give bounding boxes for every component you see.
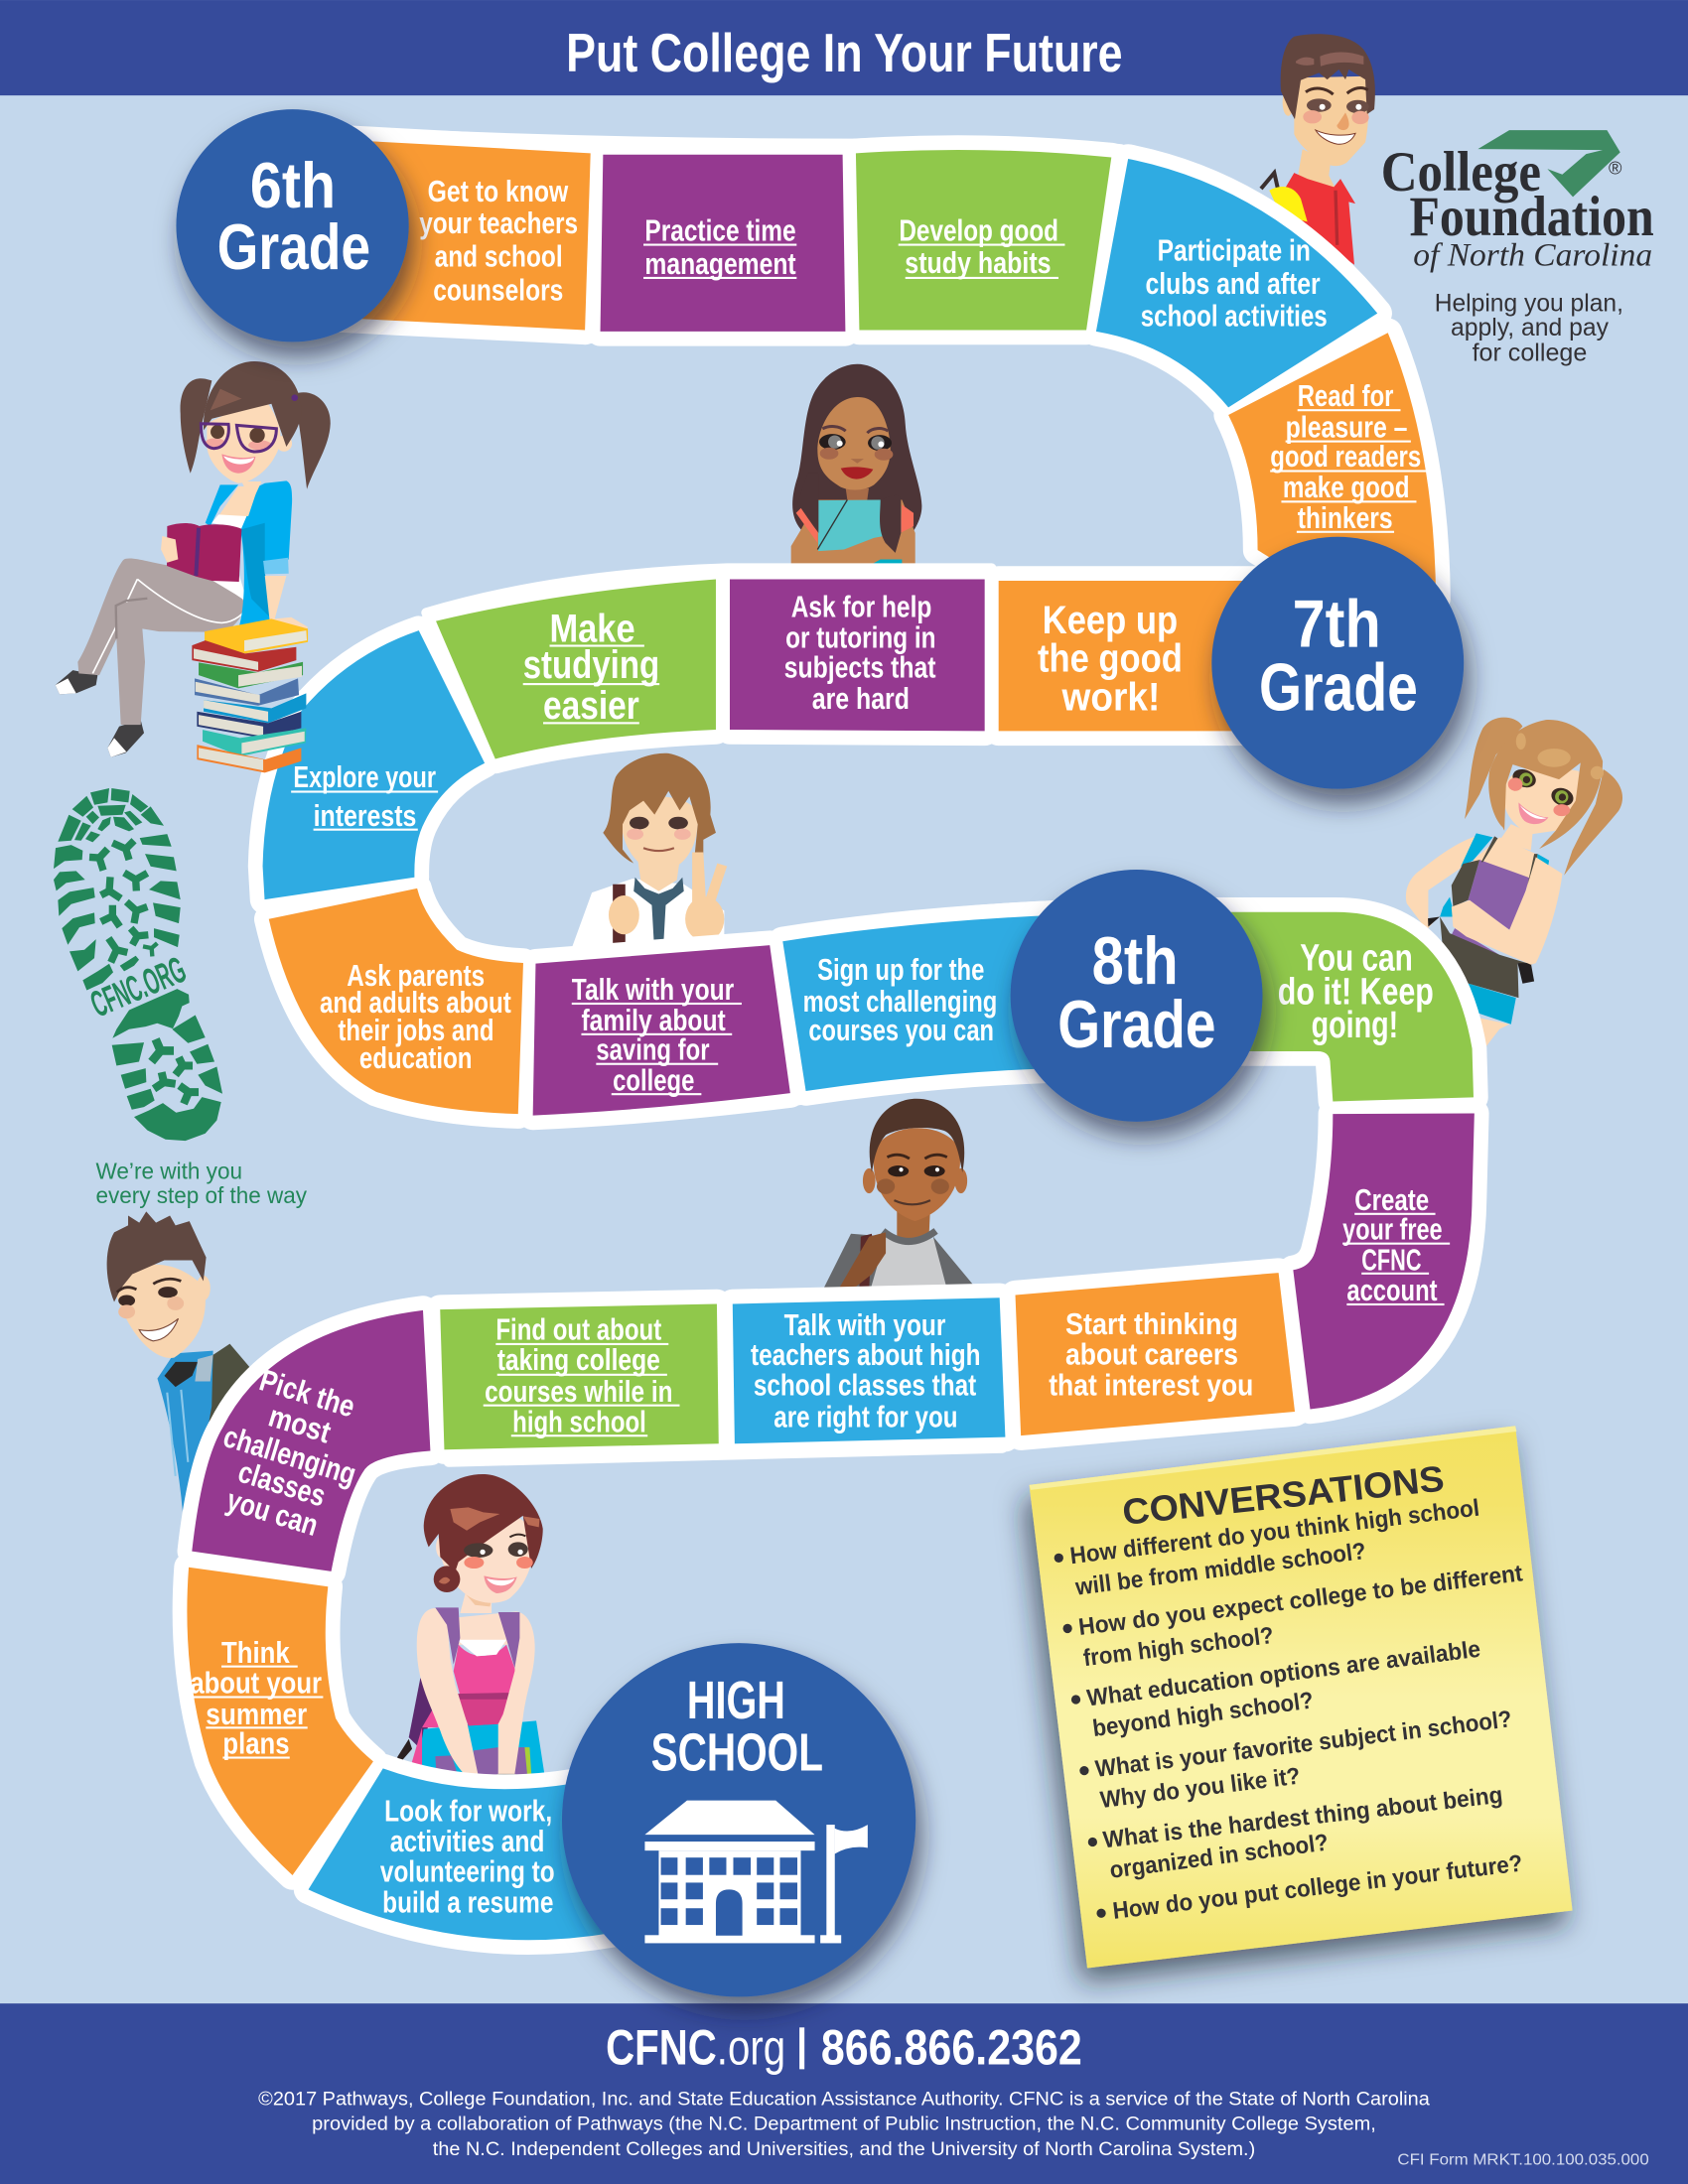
step: explore your interests: interests	[314, 798, 416, 833]
step: think about your summer plans: Think	[221, 1635, 290, 1670]
circle: High School with building icon	[562, 1643, 915, 1996]
step: you can do it: going!	[1312, 1005, 1398, 1046]
step: participate in clubs: school activities	[1141, 298, 1328, 333]
step: find out about college courses: Find out about	[495, 1311, 661, 1346]
tagline: apply, and pay	[1451, 314, 1609, 341]
circle: 6th Grade: Grade	[217, 211, 370, 283]
logo: College Foundation of North Carolina: Foundation	[1409, 186, 1654, 248]
step: ask for help: subjects that	[784, 649, 936, 684]
step: develop good study habits	[856, 150, 1111, 330]
step: ask parents and adults: and adults about	[320, 985, 511, 1020]
step: pick the most challenging classes: challenging	[219, 1419, 360, 1492]
note questions list: Why do you like it?	[1099, 1763, 1302, 1814]
circle: 7th Grade: Grade	[1259, 650, 1418, 725]
circle: High School with building icon: SCHOOL	[651, 1722, 823, 1782]
step: pick the most challenging classes: classes	[234, 1454, 330, 1513]
logo: College Foundation of North Carolina: College	[1381, 141, 1541, 204]
step: sign up for challenging courses	[782, 915, 1058, 1091]
step: explore your interests: Explore your	[293, 759, 436, 794]
step: look for work activities: activities and	[390, 1824, 544, 1858]
step: ask for help: Ask for help	[791, 589, 931, 623]
step: practice time management	[601, 155, 845, 332]
step: think about your summer plans: plans	[222, 1726, 289, 1761]
step: you can do it	[1197, 912, 1474, 1102]
step: read for pleasure	[1228, 333, 1436, 599]
header band	[0, 0, 1688, 95]
step: read for pleasure: good readers	[1270, 439, 1421, 474]
step: pick the most challenging classes: most	[265, 1399, 335, 1449]
step: participate in clubs: clubs and after	[1146, 266, 1321, 301]
step: think about your summer plans: summer	[206, 1697, 307, 1731]
circle: 7th Grade	[1211, 537, 1464, 789]
step: read for pleasure: pleasure –	[1286, 409, 1408, 444]
panel: conversations sticky note	[1030, 1426, 1573, 1969]
step: make studying easier: Make	[549, 608, 635, 651]
step: practice time management: management	[644, 246, 796, 281]
step: create your free CFNC account: account	[1346, 1273, 1438, 1307]
character: boy with blue hoodie	[107, 1211, 253, 1526]
character: boy with red shirt	[1261, 34, 1375, 265]
step: ask parents and adults	[269, 888, 523, 1114]
step: develop good study habits: study habits	[905, 245, 1052, 280]
footprint: boot print	[54, 788, 222, 1141]
step: pick the most challenging classes	[192, 1310, 430, 1571]
footer contact line	[606, 2019, 1082, 2076]
step: develop good study habits: Develop good	[899, 213, 1058, 248]
note questions list: How different do you think high school	[1068, 1495, 1480, 1570]
footer contact line: CFNC.org	[606, 2019, 785, 2076]
step: start thinking about careers: about careers	[1065, 1337, 1238, 1372]
step: explore your interests	[263, 630, 485, 899]
step: talk with your family	[533, 945, 790, 1116]
circle: 8th Grade: Grade	[1057, 988, 1216, 1062]
step: pick the most challenging classes: you can	[222, 1482, 322, 1543]
step: create your free CFNC account: your free	[1342, 1211, 1443, 1246]
step: make studying easier: studying	[523, 643, 659, 687]
circle: 8th Grade: 8th	[1092, 924, 1179, 999]
step: ask for help: or tutoring in	[785, 619, 936, 654]
step: participate in clubs	[1096, 159, 1377, 407]
character: girl with pigtails and purple book	[1406, 718, 1622, 1050]
step: you can do it: do it! Keep	[1278, 971, 1434, 1013]
step: create your free CFNC account	[1293, 1113, 1475, 1410]
note questions list: How do you expect college to be different	[1077, 1560, 1524, 1641]
step: get to know your teachers: and school	[435, 239, 563, 274]
character: boy with gray raglan shirt	[823, 1099, 973, 1290]
circle: 8th Grade	[1011, 870, 1262, 1122]
step: start thinking about careers: Start thinking	[1065, 1306, 1238, 1341]
step: talk with your teachers: Talk with your	[784, 1307, 945, 1342]
logo: College Foundation of North Carolina: of North Carolina	[1413, 236, 1652, 272]
step: make studying easier: easier	[543, 684, 639, 728]
character: girl with pink top and books	[397, 1474, 546, 1785]
step: find out about college courses	[440, 1303, 719, 1449]
step: ask parents and adults: their jobs and	[338, 1013, 494, 1047]
step: look for work activities	[309, 1768, 613, 1940]
logo: College Foundation of North Carolina	[1381, 130, 1654, 272]
step: participate in clubs: Participate in	[1158, 232, 1311, 267]
note questions list: from high school?	[1081, 1622, 1275, 1672]
step: you can do it: You can	[1300, 938, 1413, 980]
step: talk with your teachers	[733, 1297, 1005, 1443]
step: read for pleasure: Read for	[1298, 378, 1393, 413]
step: look for work activities: Look for work,	[384, 1793, 552, 1828]
step: talk with your family: saving for	[596, 1031, 710, 1066]
step: get to know your teachers: counselors	[433, 272, 563, 307]
copyright text	[258, 2088, 1430, 2160]
note questions list: What education options are available	[1085, 1636, 1482, 1712]
copyright text: ©2017 Pathways, College Foundation, Inc. and State Education Assistance Authority. CFNC is a service of the State of North Carolina	[258, 2088, 1430, 2110]
step: sign up for challenging courses: most challenging	[803, 984, 997, 1019]
note questions list: What is your favorite subject in school?	[1094, 1706, 1513, 1783]
step: talk with your family: family about	[581, 1003, 726, 1037]
logo: College Foundation of North Carolina: ®	[1609, 157, 1622, 178]
step: keep up the good work	[999, 581, 1295, 731]
character: girl reading on stack of books	[56, 361, 331, 772]
step: sign up for challenging courses: courses you can	[808, 1013, 994, 1047]
circle: 6th Grade	[176, 109, 409, 341]
footprint caption	[96, 1158, 307, 1208]
step: talk with your teachers: teachers about high	[751, 1337, 980, 1372]
copyright text: provided by a collaboration of Pathways (the N.C. Department of Public Instruction, the N.C. Community College System,	[312, 2114, 1376, 2135]
circle: 6th Grade: 6th	[250, 150, 336, 221]
icon: school building with flag	[644, 1801, 868, 1943]
footprint caption: every step of the way	[96, 1182, 307, 1208]
step: think about your summer plans	[187, 1568, 373, 1875]
step: think about your summer plans: about your	[190, 1665, 322, 1700]
character: boy making peace sign	[570, 753, 727, 954]
step: ask parents and adults: Ask parents	[347, 958, 485, 993]
step: look for work activities: build a resume	[382, 1884, 553, 1919]
step: start thinking about careers: that interest you	[1049, 1367, 1253, 1402]
character: girl with long dark hair	[791, 364, 921, 567]
circle: 7th Grade: 7th	[1293, 588, 1381, 662]
form number: CFI Form MRKT.100.100.035.000	[1397, 2150, 1649, 2168]
step: create your free CFNC account: Create	[1354, 1182, 1429, 1217]
tagline	[1435, 289, 1623, 366]
footer contact line: 866.866.2362	[821, 2019, 1082, 2076]
note questions list: beyond high school?	[1091, 1687, 1315, 1742]
step: keep up the good work: Keep up	[1043, 599, 1178, 642]
note questions list	[1055, 1495, 1524, 1925]
tagline: for college	[1473, 339, 1587, 366]
step: find out about college courses: high school	[512, 1405, 646, 1439]
step: ask for help: are hard	[812, 681, 910, 716]
copyright text: the N.C. Independent Colleges and Universities, and the University of North Carolina System.)	[433, 2138, 1255, 2160]
note questions list: will be from middle school?	[1073, 1538, 1367, 1601]
step: pick the most challenging classes: Pick the	[255, 1362, 359, 1425]
step: find out about college courses: taking college	[497, 1342, 660, 1377]
footprint caption: We’re with you	[96, 1158, 242, 1183]
step: talk with your teachers: are right for you	[774, 1399, 957, 1433]
step: get to know your teachers: your teachers	[419, 205, 578, 240]
step: make studying easier	[436, 580, 716, 758]
step: ask for help	[730, 580, 985, 731]
note heading: CONVERSATIONS	[1120, 1458, 1446, 1533]
step: get to know your teachers: Get to know	[428, 174, 569, 208]
step: keep up the good work: work!	[1061, 675, 1160, 719]
step: talk with your teachers: school classes that	[754, 1367, 976, 1402]
step: practice time management: Practice time	[644, 213, 796, 248]
step: talk with your family: college	[613, 1062, 694, 1097]
note questions list: What is the hardest thing about being	[1101, 1782, 1504, 1853]
step: talk with your family: Talk with your	[572, 972, 734, 1007]
board path white border	[187, 132, 1475, 1940]
step: look for work activities: volunteering to	[380, 1854, 555, 1889]
step: read for pleasure: thinkers	[1298, 500, 1393, 535]
note questions list: How do you put college in your future?	[1111, 1850, 1524, 1925]
step: find out about college courses: courses while in	[485, 1374, 672, 1409]
note questions list: organized in school?	[1108, 1830, 1330, 1884]
step: read for pleasure: make good	[1283, 470, 1409, 504]
footprint: boot print: CFNC.ORG	[84, 948, 192, 1024]
step: sign up for challenging courses: Sign up for the	[817, 952, 984, 987]
step: ask parents and adults: education	[359, 1040, 472, 1075]
circle: High School with building icon: HIGH	[687, 1671, 785, 1730]
tagline: Helping you plan,	[1435, 289, 1623, 317]
footer band	[0, 2003, 1688, 2184]
step: get to know your teachers	[335, 139, 591, 330]
step: keep up the good work: the good	[1038, 637, 1183, 681]
step: create your free CFNC account: CFNC	[1361, 1242, 1422, 1277]
title: Put College In Your Future	[566, 22, 1123, 83]
step: start thinking about careers	[1016, 1273, 1295, 1435]
